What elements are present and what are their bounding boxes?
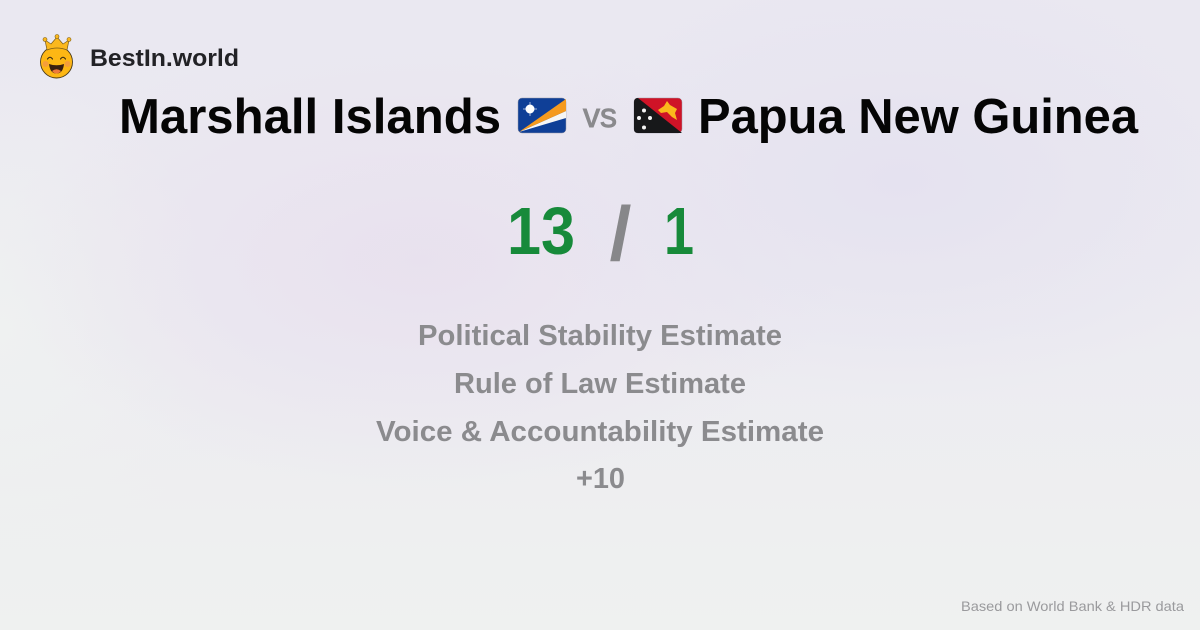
more indicators count: +10 [576, 463, 625, 495]
indicator: political stability: Political Stability Estimate [418, 320, 782, 352]
icon: Papua New Guinea flag [634, 98, 682, 133]
brand name: BestIn.world [90, 45, 239, 72]
country name: Papua New Guinea: Papua New Guinea [698, 90, 1139, 144]
score: Papua New Guinea: 1 [664, 194, 694, 269]
logo [40, 34, 239, 78]
icon: smiling face with crown [40, 34, 72, 78]
title [119, 90, 1139, 144]
indicator: rule of law: Rule of Law Estimate [454, 368, 746, 400]
source note: Based on World Bank & HDR data [961, 598, 1184, 614]
icon: Marshall Islands flag [518, 98, 566, 133]
list of indicators [376, 320, 824, 495]
indicator: voice and accountability: Voice & Accountability Estimate [376, 416, 824, 448]
score separator: / [610, 192, 632, 276]
score: Marshall Islands: 13 [507, 194, 575, 269]
country name: Marshall Islands: Marshall Islands [119, 90, 501, 144]
vs label: vs [583, 97, 617, 135]
score [507, 192, 694, 276]
